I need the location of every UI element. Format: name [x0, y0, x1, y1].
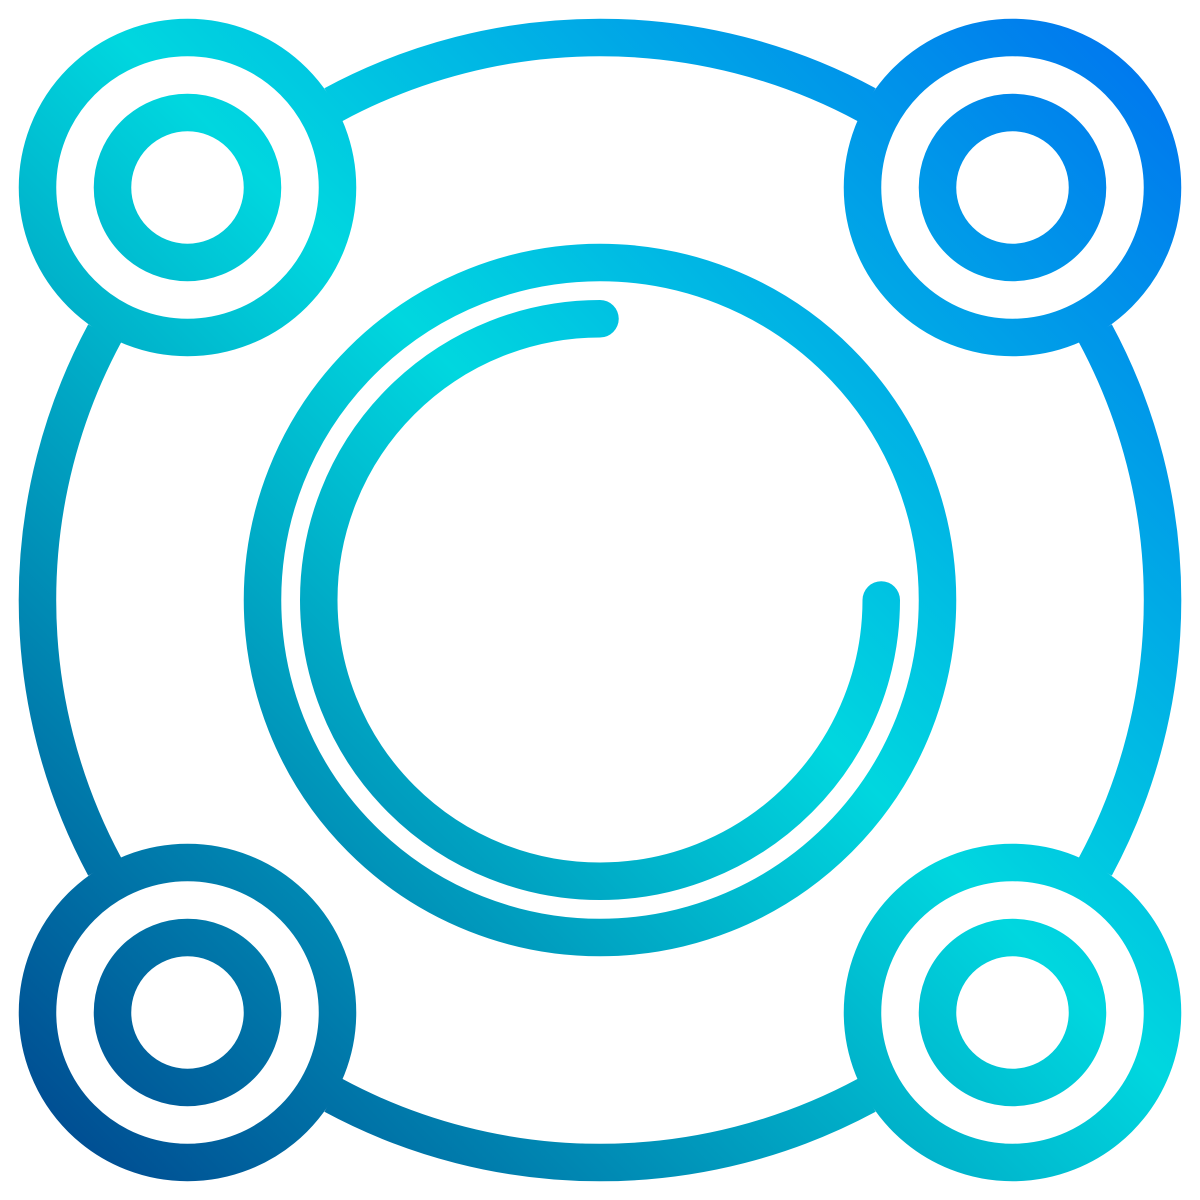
- outer ring: right arc: [1095, 333, 1163, 867]
- outer ring: left arc: [37, 333, 105, 867]
- top-right node: [862, 38, 1162, 338]
- outer ring: top arc: [333, 37, 867, 105]
- center ring: [262, 262, 938, 938]
- bottom-left node: [38, 862, 338, 1162]
- bottom-right node: [862, 862, 1162, 1162]
- top-left node: [38, 38, 338, 338]
- outer ring: bottom arc: [333, 1095, 867, 1163]
- inner open arc: [319, 319, 881, 881]
